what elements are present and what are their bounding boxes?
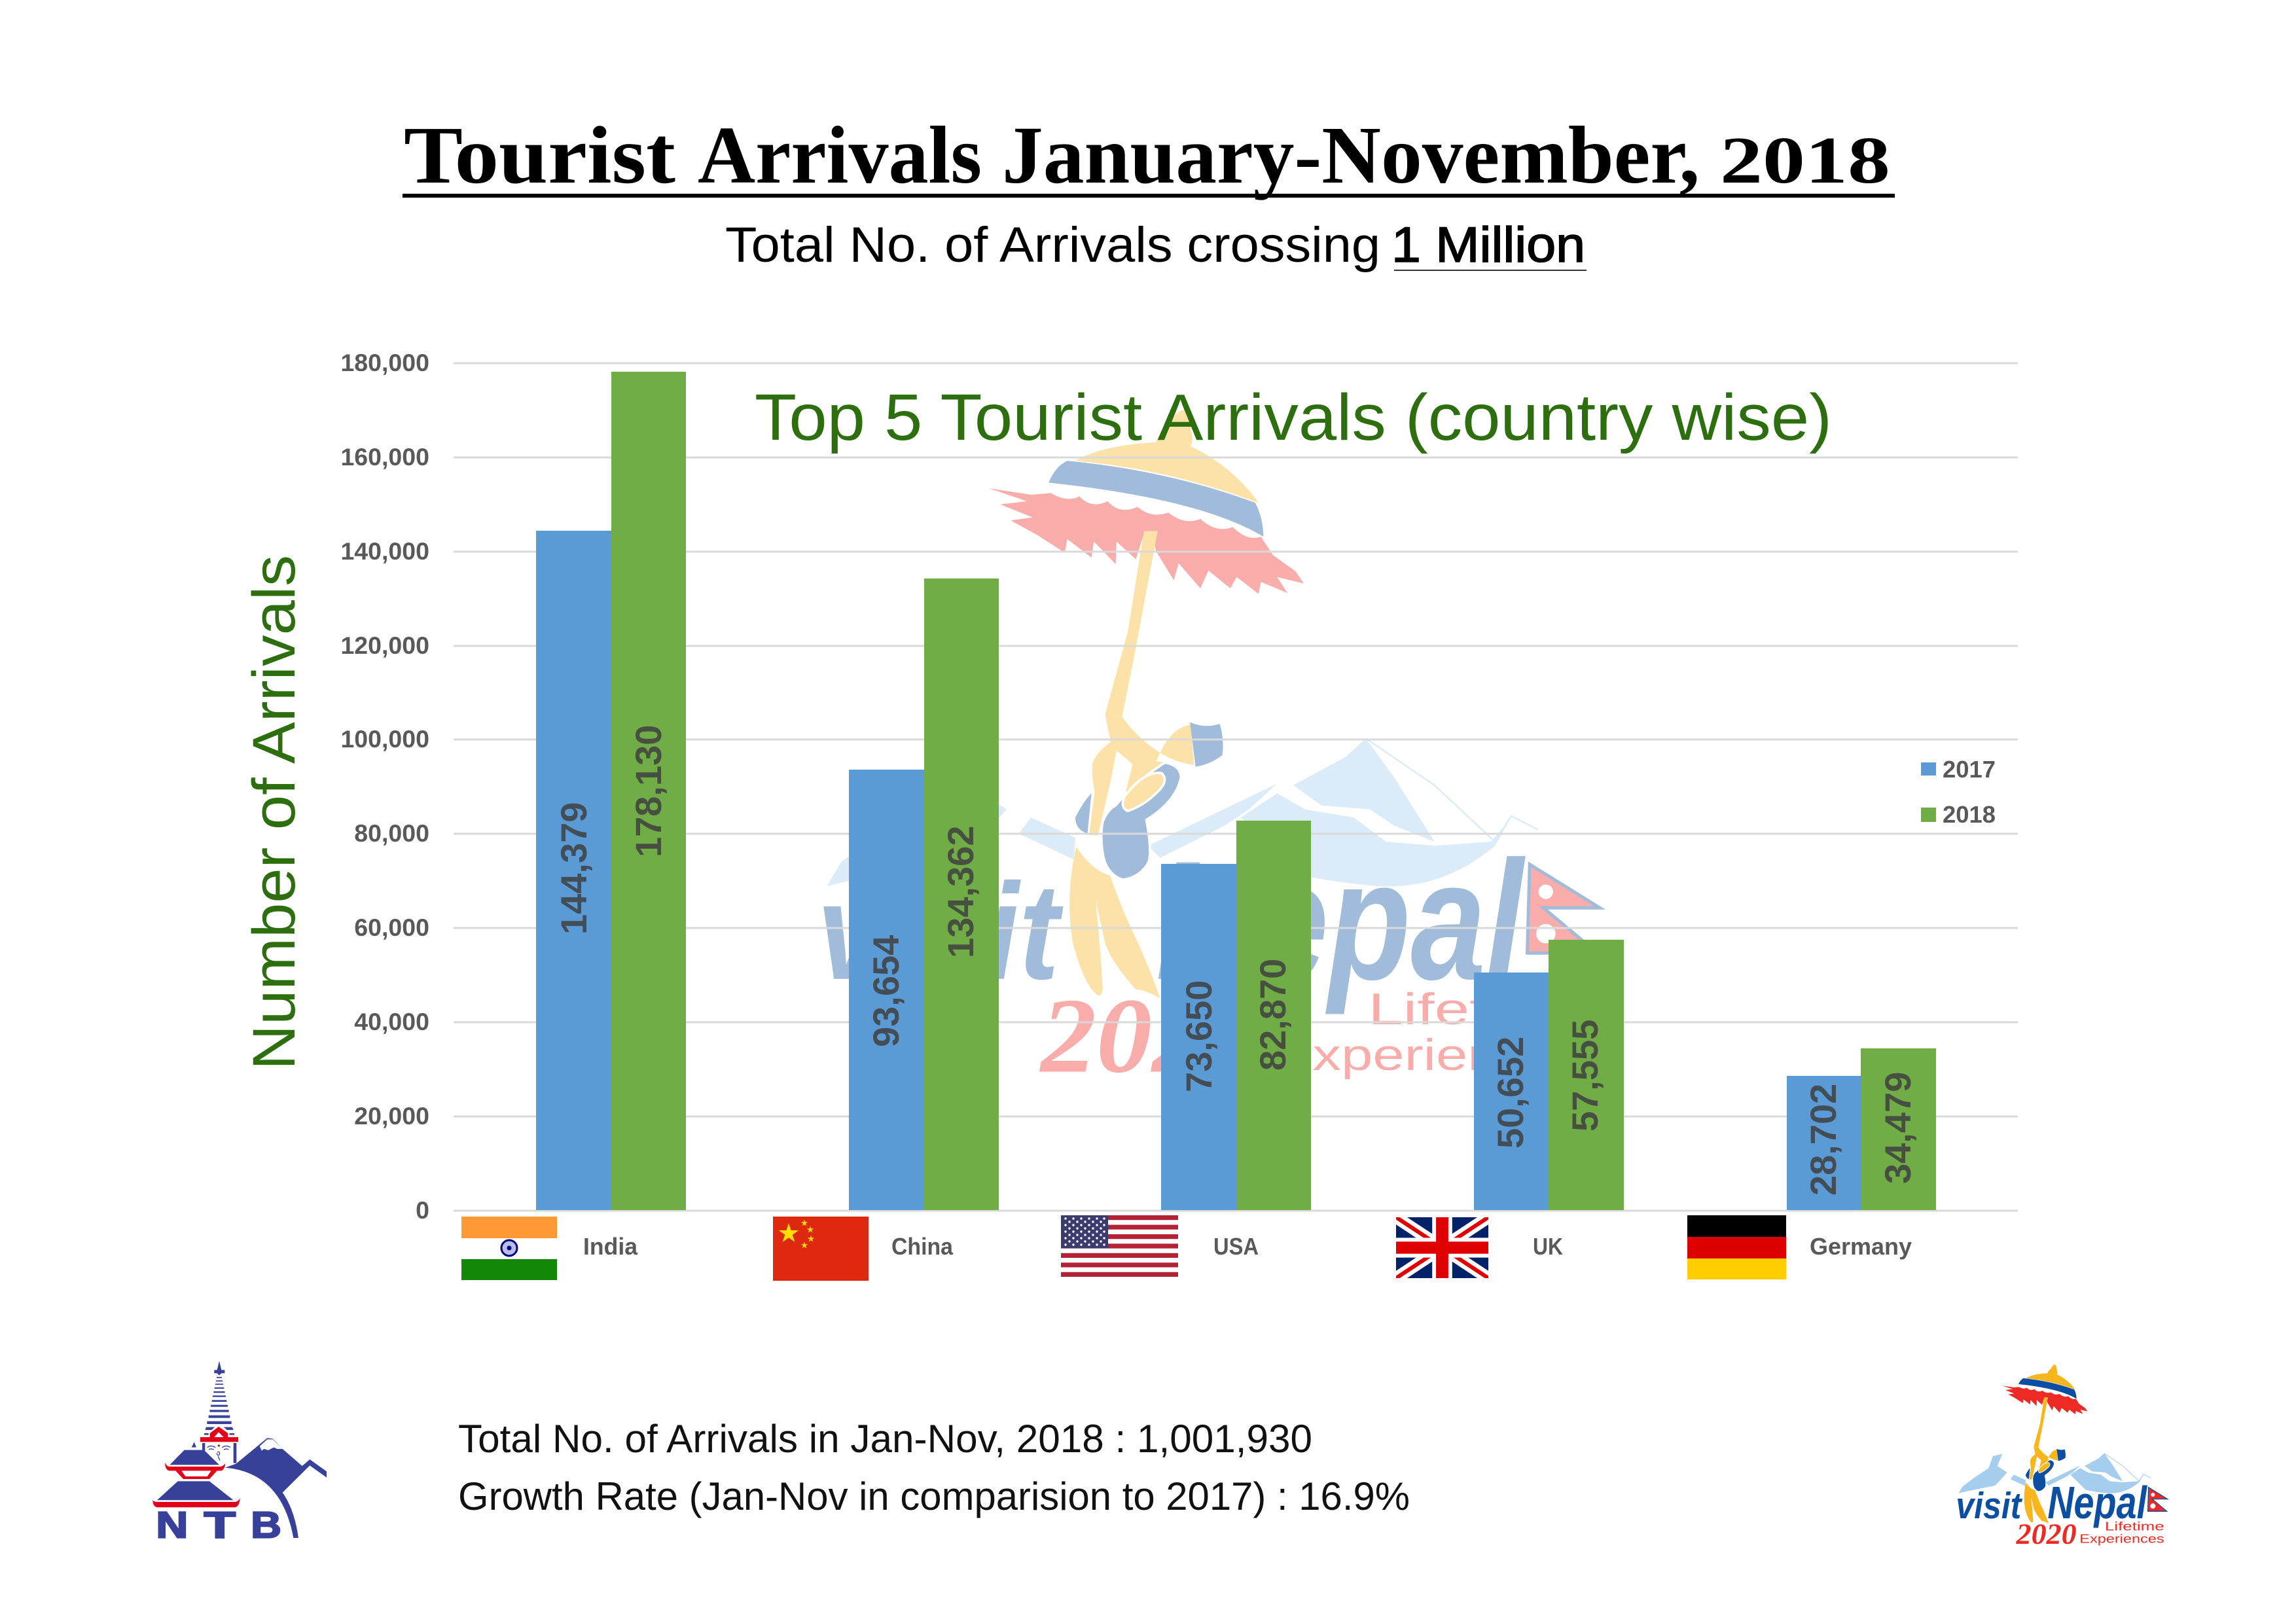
chart gridlines and y axis: 160,000 xyxy=(340,443,429,471)
logo: Visit Nepal 2020: Lifetime xyxy=(2105,1520,2164,1533)
watermark: Visit Nepal 2020 logo: 2020 xyxy=(1039,977,1263,1096)
logo: Visit Nepal 2020: Experiences xyxy=(2079,1532,2164,1546)
title xyxy=(403,111,1895,201)
legend: 2017 xyxy=(1943,756,1996,783)
bars: USA xyxy=(1161,821,1311,1210)
subtitle: 1 Million xyxy=(1391,217,1585,273)
subtitle: Total No. of Arrivals crossing xyxy=(725,217,1380,273)
logo: NTB xyxy=(152,1361,327,1546)
bars: Germany: 28,702 xyxy=(1803,1084,1844,1196)
category: USA flag xyxy=(1061,1215,1178,1277)
watermark: Visit Nepal 2020 logo: visit xyxy=(817,855,1064,1008)
bars: India xyxy=(536,372,686,1210)
logo: NTB: N xyxy=(156,1504,188,1546)
chart heading: Top 5 Tourist Arrivals (country wise) xyxy=(755,381,1832,454)
bars: Germany: 34,479 xyxy=(1877,1072,1918,1184)
chart gridlines and y axis: 100,000 xyxy=(340,725,429,753)
logo: Visit Nepal 2020 xyxy=(1956,1364,2168,1550)
watermark: Visit Nepal 2020 logo: Nepal xyxy=(1156,826,1526,1016)
bars: China: 134,362 xyxy=(940,826,981,958)
category label: India: India xyxy=(583,1233,638,1260)
bars: UK: 50,652 xyxy=(1490,1037,1531,1149)
chart gridlines and y axis: 80,000 xyxy=(354,819,429,847)
summary text: Total No. of Arrivals in Jan-Nov, 2018 : 1,001,930 xyxy=(458,1417,1312,1461)
category label: China: China xyxy=(891,1233,954,1260)
watermark: Visit Nepal 2020 logo xyxy=(817,410,1600,1096)
bars: India: 178,130 xyxy=(628,725,669,857)
chart gridlines and y axis: 20,000 xyxy=(354,1102,429,1130)
summary text xyxy=(458,1417,1410,1518)
logo: Visit Nepal 2020: 2020 xyxy=(2016,1518,2077,1550)
logo: Visit Nepal 2020: visit xyxy=(1956,1486,2022,1527)
legend: 2018 xyxy=(1943,801,1996,828)
chart gridlines and y axis: 60,000 xyxy=(354,914,429,941)
category label: UK: UK xyxy=(1533,1233,1563,1260)
chart gridlines and y axis: 140,000 xyxy=(340,537,429,565)
category: China flag xyxy=(773,1217,869,1281)
bars: UK xyxy=(1474,940,1624,1210)
chart gridlines and y axis: 120,000 xyxy=(340,632,429,659)
title: January-November, xyxy=(1002,111,1700,201)
bars: China: 93,654 xyxy=(865,935,906,1047)
bars: India: 144,379 xyxy=(553,802,594,935)
legend xyxy=(1921,756,1996,828)
title: 2018 xyxy=(1720,124,1890,198)
chart gridlines and y axis: 40,000 xyxy=(354,1008,429,1035)
chart gridlines and y axis: 0 xyxy=(416,1196,429,1224)
category: Germany flag xyxy=(1687,1215,1786,1279)
category label: Germany: Germany xyxy=(1810,1233,1912,1260)
chart gridlines and y axis: 180,000 xyxy=(340,349,429,376)
title: Arrivals xyxy=(698,111,982,201)
bars: Germany xyxy=(1787,1048,1936,1210)
watermark: Visit Nepal 2020 logo: Lifetime xyxy=(1369,985,1588,1034)
category: India flag xyxy=(461,1217,557,1280)
watermark: Visit Nepal 2020 logo: Experiences xyxy=(1275,1031,1588,1080)
bars: China xyxy=(849,579,999,1210)
logo: NTB: B xyxy=(251,1504,281,1546)
summary text: Growth Rate (Jan-Nov in comparision to 2017) : 16.9% xyxy=(458,1474,1410,1518)
title: Tourist xyxy=(404,111,675,201)
y axis title: Number of Arrivals xyxy=(241,555,308,1070)
bars: USA: 73,650 xyxy=(1178,980,1219,1092)
logo: NTB: T xyxy=(204,1504,236,1546)
chart gridlines and y axis xyxy=(340,349,2018,1224)
bars: UK: 57,555 xyxy=(1564,1020,1605,1132)
logo: Visit Nepal 2020: Nepal xyxy=(2047,1477,2147,1528)
category label: USA: USA xyxy=(1213,1233,1259,1260)
bars: USA: 82,870 xyxy=(1252,959,1293,1071)
category: UK flag xyxy=(1396,1217,1488,1278)
